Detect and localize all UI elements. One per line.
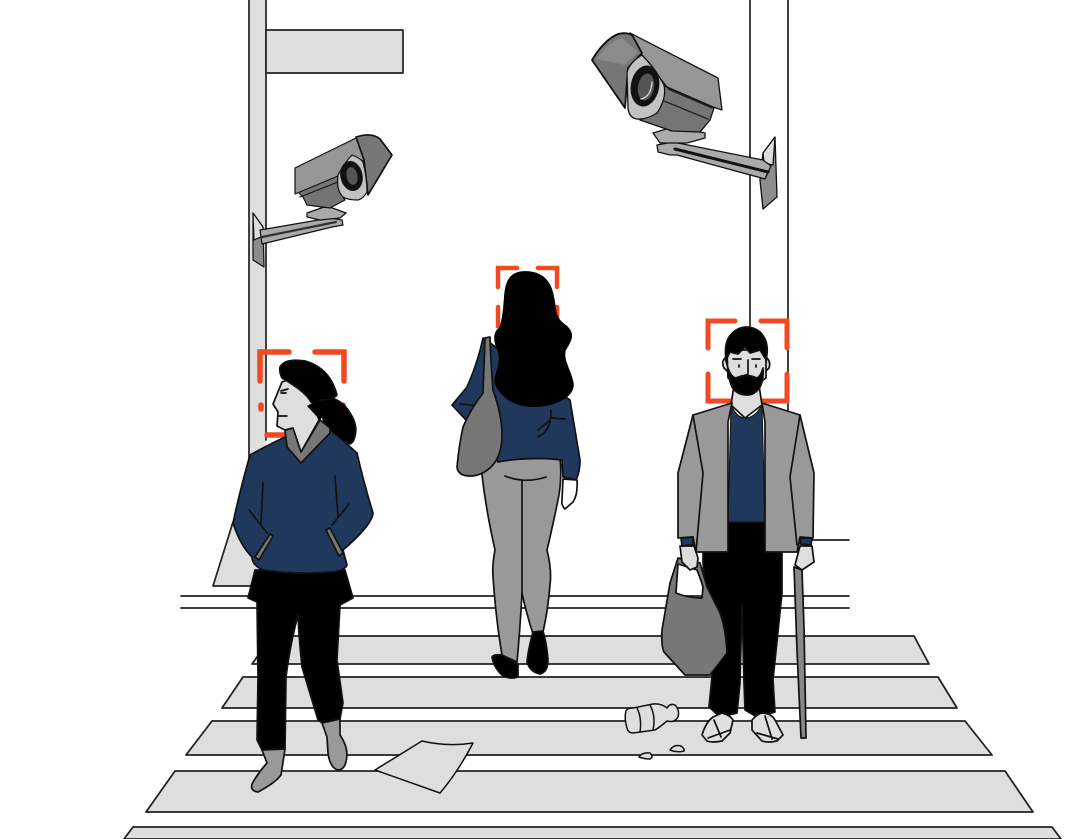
sandals [702,713,733,742]
jacket left [678,403,732,552]
camera arm [260,218,343,244]
hair [725,327,767,360]
camera front plate [338,155,367,200]
camera hood interior [592,33,642,108]
discarded paper [375,741,473,793]
second pole [750,0,849,540]
eyes and nose [733,359,760,375]
person: man with cane and bag [662,327,814,742]
camera: right [592,33,777,209]
camera hood interior [356,135,392,195]
wall bracket [760,137,777,209]
hair [280,360,337,405]
collar [285,420,330,463]
camera body [298,174,345,208]
cane [794,567,806,738]
face features [278,389,288,416]
camera: left [253,135,392,267]
camera hood side [630,33,722,110]
camera front plate [627,55,665,119]
plastic bottle and litter [625,704,684,759]
shoulder bag [457,337,502,476]
ponytail [320,395,356,444]
beard [728,368,763,395]
person: woman on the left with hands in pockets [233,360,373,792]
jacket right [762,403,814,552]
person: woman in middle seen from behind [452,272,580,678]
camera arm [657,142,771,179]
wall bracket [253,213,264,267]
face detection bracket: right person [708,321,787,401]
pockets [255,534,273,560]
lens [628,64,662,108]
curb lines [181,596,849,608]
face and neck [273,375,325,452]
long hair [495,272,573,406]
sweater [452,338,580,480]
camera hood side [295,135,372,194]
boots [252,749,285,792]
face detection bracket: middle person [498,268,557,326]
camera body [640,84,714,132]
sweater [233,430,373,573]
neck [731,385,762,418]
street sign pole [213,0,403,586]
mount plate [653,127,705,143]
skirt and trousers [248,570,353,750]
shoes [492,655,518,678]
face detection bracket: left person [260,352,344,435]
hands [680,546,698,570]
mount plate [307,206,346,220]
shirt [728,405,765,522]
crosswalk stripes [124,636,1061,839]
lens [338,160,365,192]
shopping bag [662,558,727,675]
hand [562,479,577,509]
leggings [482,458,561,662]
cuffs [681,537,693,546]
ears and face [723,358,770,374]
trousers [703,522,782,717]
